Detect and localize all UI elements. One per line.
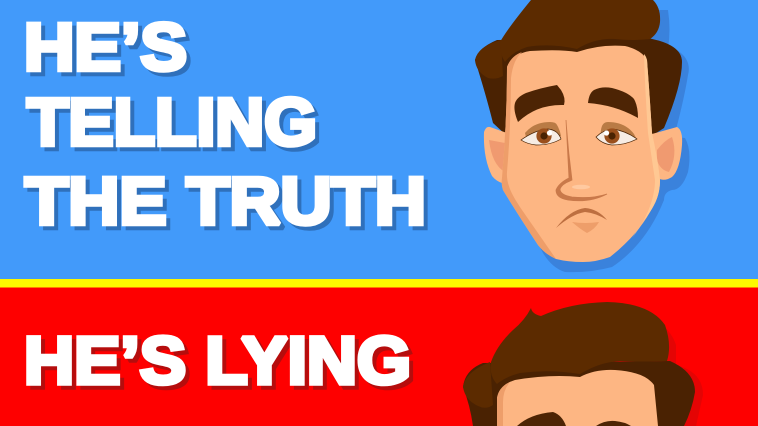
face right highlight [632, 54, 660, 238]
heading: he's telling the truth: TELLING [31, 89, 321, 164]
nose [556, 120, 607, 201]
top hair [491, 302, 669, 384]
illustration: sad man's face [475, 0, 689, 272]
face left shading [502, 52, 556, 259]
heading: he's telling the truth: HE’S [28, 14, 191, 89]
chin shadow [572, 222, 599, 233]
right eye [596, 122, 637, 145]
left eyebrow [517, 412, 566, 426]
heading: he's lying: HE’S LYING [24, 324, 411, 398]
face drop shadow [520, 10, 689, 272]
back hair [463, 361, 695, 426]
heading: he's telling the truth: THE TRUTH [29, 168, 430, 243]
heading: he's telling the truth: THE TRUTH [25, 164, 426, 239]
right ear [652, 127, 682, 180]
head [497, 370, 658, 426]
head [502, 46, 660, 262]
mouth [556, 208, 607, 228]
left hair lobe [475, 40, 503, 79]
nose highlight [572, 185, 590, 189]
right eyebrow [588, 87, 638, 118]
left ear [484, 127, 507, 183]
heading: he's telling the truth [24, 10, 430, 243]
face left shading [497, 382, 510, 426]
top hair [500, 0, 660, 62]
panel: red lie background [0, 287, 758, 426]
left hair lobe [463, 362, 493, 408]
heading: he's lying: HE’S LYING [28, 328, 415, 402]
heading: he's telling the truth: TELLING [27, 85, 317, 160]
illustration: lying man's face, cropped at the bottom [463, 302, 703, 426]
panel: blue truth background [0, 0, 758, 279]
left eyebrow [514, 85, 565, 122]
left eye [521, 122, 561, 145]
heading: he's telling the truth: HE’S [24, 10, 187, 85]
right eyebrow [596, 421, 631, 426]
yellow divider band [0, 279, 758, 288]
back hair [475, 38, 682, 137]
face drop shadow [520, 310, 703, 426]
